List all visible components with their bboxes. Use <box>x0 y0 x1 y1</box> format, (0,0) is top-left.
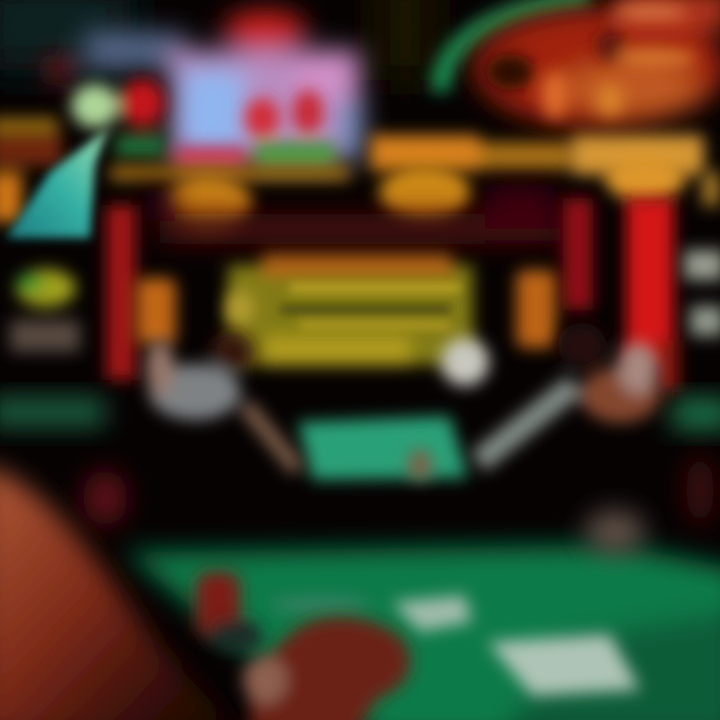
mid green rail <box>0 398 720 430</box>
red columns <box>106 198 679 392</box>
marquee: colourful sign <box>46 10 363 170</box>
right slot machine <box>684 250 720 336</box>
foreground green table <box>125 545 720 720</box>
left player <box>146 332 298 470</box>
player at right table edge <box>585 510 645 554</box>
hanging lamps <box>164 154 720 231</box>
foreground hand and arm <box>0 465 410 720</box>
orange side panels <box>136 270 556 348</box>
yellow central sign <box>226 254 473 366</box>
back poker table <box>298 416 468 480</box>
table edge reds <box>83 454 714 526</box>
left slot machine <box>10 269 80 352</box>
chip stack <box>196 572 263 651</box>
teal light beam <box>6 128 108 238</box>
upper wall tint <box>0 0 435 80</box>
right player <box>408 323 660 481</box>
playing cards <box>270 595 640 696</box>
orange canopy band <box>0 118 704 222</box>
casino sign: top right <box>440 0 720 128</box>
dark red back wall <box>145 185 560 244</box>
